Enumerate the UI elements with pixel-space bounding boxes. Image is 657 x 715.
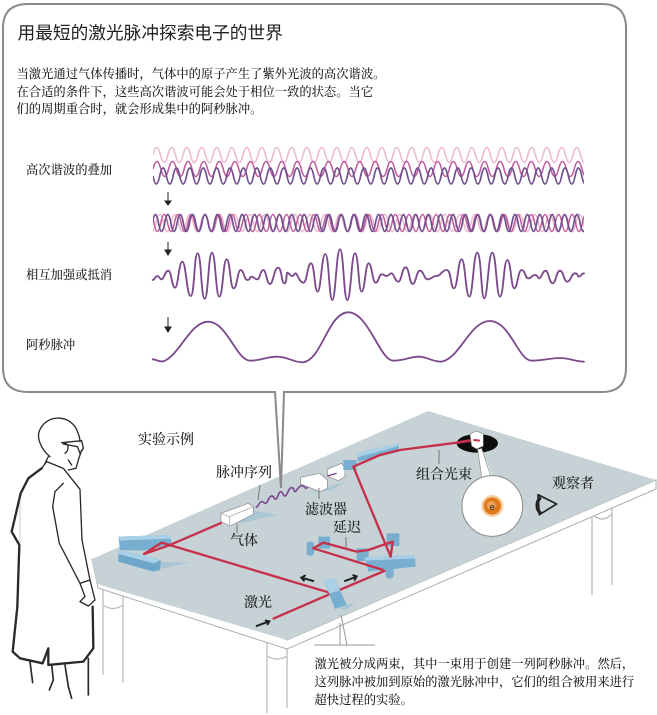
label: reinforce or cancel: 相互加强或抵消: [26, 267, 112, 282]
harmonic waves row 1: [153, 148, 590, 184]
intro text: 在合适的条件下，这些高次谐波可能会处于相位一致的状态。当它: [16, 84, 373, 99]
beam splitter: [324, 578, 355, 610]
label: observer: 观察者: [552, 475, 594, 492]
label: harmonic superposition: 高次谐波的叠加: [26, 162, 112, 177]
detection spot: [457, 431, 498, 453]
intro text: [16, 66, 385, 116]
leader lines: [237, 450, 439, 645]
electron label: e: [490, 502, 495, 512]
optics group, right: [307, 431, 557, 610]
label: filter: 滤波器: [305, 501, 347, 518]
intro text: 们的周期重合时，就会形成集中的阿秒脉冲。: [16, 101, 262, 116]
direction arrows: [257, 575, 357, 626]
title: 用最短的激光脉冲探索电子的世界: [18, 23, 283, 43]
bottom description: [314, 656, 634, 707]
interference wave: [153, 249, 584, 300]
filter boxes: [301, 463, 347, 493]
bottom description: 超快过程的实验。: [314, 692, 413, 707]
upper mirrors: [343, 443, 399, 470]
laser beam: [144, 523, 387, 619]
harmonic waves row 2: [141, 214, 593, 232]
magnified view of electron: [462, 448, 523, 536]
label: pulse train: 脉冲序列: [216, 464, 272, 481]
label: attosecond pulse: 阿秒脉冲: [26, 337, 75, 352]
label: combined beam: 组合光束: [416, 466, 472, 483]
icon: observer eye: [537, 495, 557, 515]
beam and optics group, left: [118, 463, 387, 626]
scientist figure: [12, 418, 95, 698]
table legs: [103, 500, 612, 713]
label: delay: 延迟: [333, 520, 361, 536]
intro text: 当激光通过气体传播时，气体中的原子产生了紫外光波的高次谐波。: [16, 66, 385, 81]
heading: experiment example: 实验示例: [138, 432, 194, 448]
delay beam path: [313, 440, 475, 570]
attosecond pulse train: [256, 483, 311, 507]
bottom description: 这列脉冲被加到原始的激光脉冲中，它们的组合被用来进行: [314, 674, 634, 689]
bottom description: 激光被分成两束，其中一束用于创建一列阿秒脉冲。然后，: [314, 656, 634, 671]
arrows between wave rows: [165, 192, 171, 332]
gas cell: [221, 503, 277, 526]
delay stage mirrors: [307, 533, 416, 578]
callout panel: attosecond pulses: [3, 4, 626, 488]
left mirrors: [118, 535, 190, 572]
label: laser: 激光: [244, 594, 272, 611]
label: gas: 气体: [230, 532, 258, 549]
table top: [92, 411, 656, 649]
attosecond pulse wave: [153, 312, 584, 362]
